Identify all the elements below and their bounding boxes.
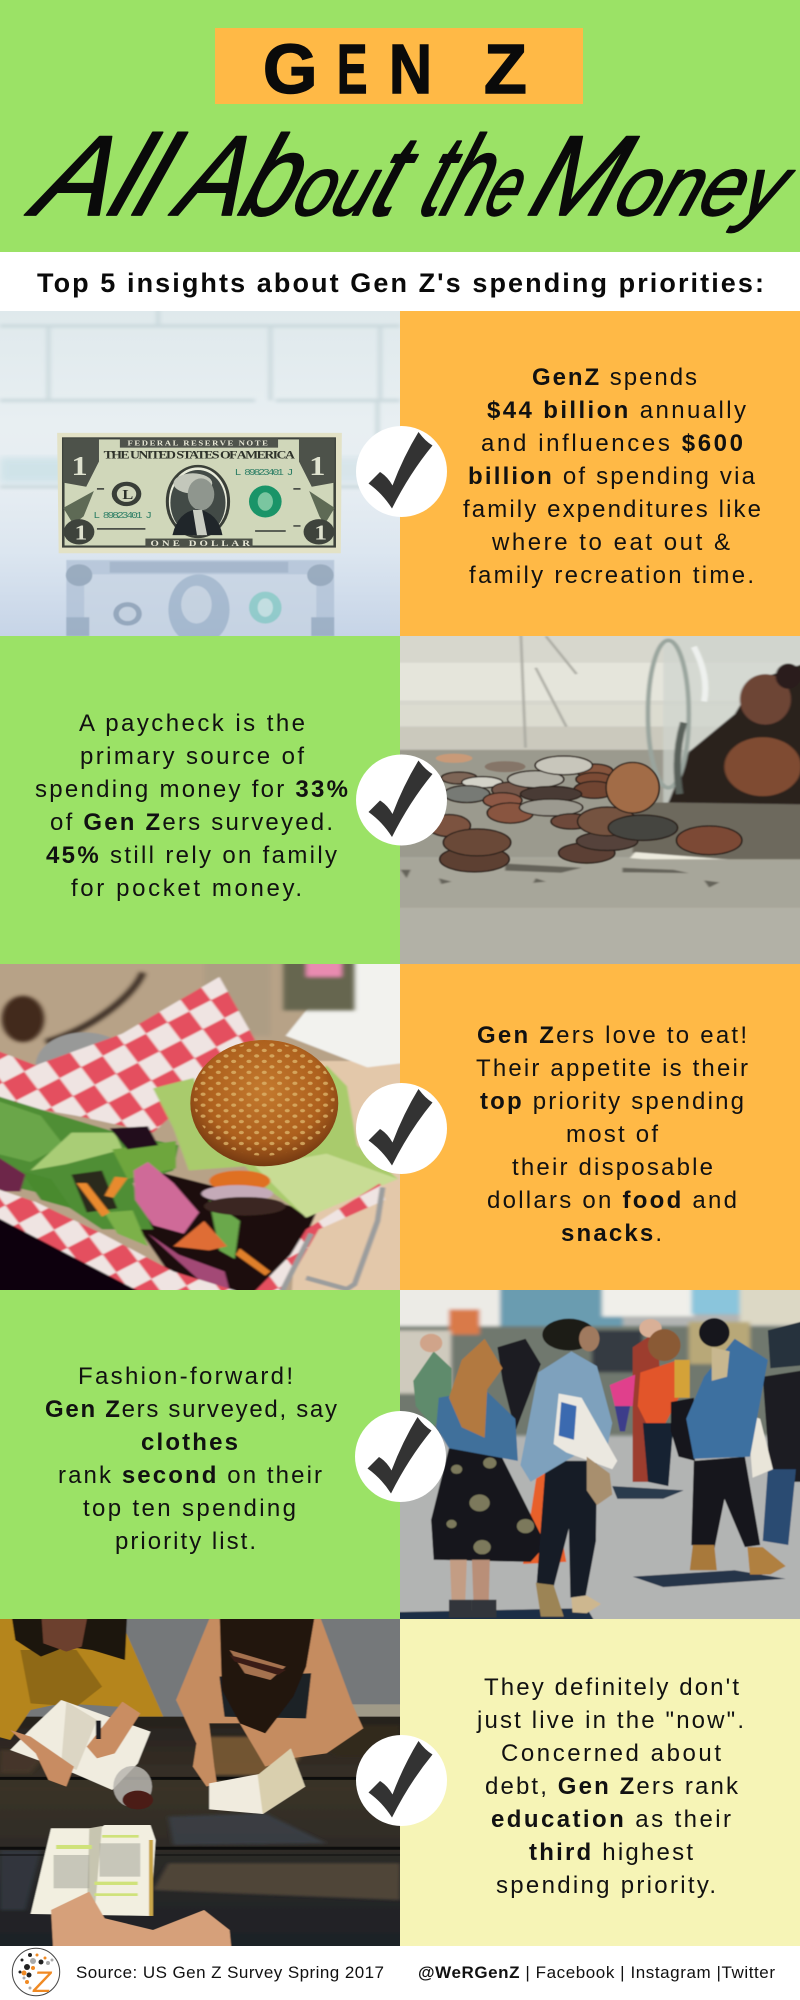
- insight text 5: spending priority.: [496, 1872, 716, 1899]
- icon: check mark 4: [355, 1411, 446, 1502]
- reflection: [66, 560, 334, 645]
- photo: dollar bill: THE UNITED STATES OF AMERICA: [104, 449, 296, 461]
- insight text 1: where to eat out &: [491, 529, 730, 556]
- panel: insight 3: [0, 947, 800, 1309]
- paper and handle: [0, 1188, 238, 1290]
- yellow background: [400, 1619, 800, 1946]
- insight text 3: Their appetite is their: [476, 1055, 748, 1082]
- insight text 4: Gen Zers surveyed, say: [45, 1396, 337, 1423]
- photo: burger and salad: [0, 964, 400, 1290]
- insight text 4: rank second on their: [58, 1462, 322, 1489]
- gen z label: Z: [484, 30, 527, 108]
- title: all about the money: All: [15, 111, 195, 239]
- insight text 5: just live in the "now".: [476, 1707, 744, 1734]
- insight text 3: snacks.: [561, 1220, 662, 1247]
- lower book: [31, 1825, 156, 1916]
- title: all about the money: [15, 111, 800, 239]
- insight text 5: They definitely don't: [484, 1674, 739, 1701]
- orange background: [400, 964, 800, 1290]
- photo: dollar bill: ONE DOLLAR: [151, 539, 251, 549]
- panel: insight 5: [0, 1607, 800, 1957]
- insight text 4: top ten spending: [83, 1495, 296, 1522]
- insight text 2: of Gen Zers surveyed.: [50, 809, 333, 836]
- greens: [0, 1090, 179, 1229]
- insight text 1: billion of spending via: [468, 463, 756, 490]
- insight text 3: [476, 1022, 748, 1247]
- header band: [0, 0, 800, 252]
- photo: dollar bill: L 89823401 J: [235, 468, 293, 479]
- green background: [0, 1290, 400, 1619]
- insight text 3: Gen Zers love to eat!: [477, 1022, 747, 1049]
- woman in denim jacket: [671, 1398, 695, 1461]
- insight text 5: [476, 1674, 744, 1899]
- photo: students reading at table: [0, 1619, 400, 1946]
- insight text 4: clothes: [141, 1429, 238, 1456]
- title: all about the money: About: [159, 111, 434, 239]
- insight text 5: third highest: [529, 1839, 693, 1866]
- insight text 2: 45% still rely on family: [46, 842, 337, 869]
- icon: we are gen z logo: [12, 1948, 60, 1999]
- insight text 4: priority list.: [115, 1528, 256, 1555]
- icon: check mark 1: [356, 426, 447, 517]
- insight text 1: GenZ spends: [532, 364, 697, 391]
- subtitle band: [0, 252, 800, 311]
- insight text 4: Fashion-forward!: [78, 1363, 293, 1390]
- insight text 2: spending money for 33%: [35, 776, 348, 803]
- icon: we are gen z logo: Z: [32, 1966, 53, 1999]
- background crowd: [413, 1351, 452, 1427]
- icon: check mark 2: [356, 754, 447, 846]
- man with tote: [537, 1461, 597, 1598]
- icon: check mark 5: [356, 1735, 447, 1826]
- social links: @WeRGenZ | Facebook | Instagram |Twitter: [418, 1963, 775, 1982]
- gen z label: E: [337, 30, 367, 108]
- gen z label: N: [389, 29, 432, 108]
- hand and arm: [50, 1892, 232, 1946]
- insight text 3: their disposable: [512, 1154, 713, 1181]
- insight text 1: family recreation time.: [469, 562, 754, 589]
- photo: dollar bill: L: [122, 488, 133, 503]
- left woman: [0, 1607, 163, 1740]
- insight text 3: top priority spending: [480, 1088, 744, 1115]
- insight text 3: most of: [566, 1121, 658, 1148]
- text block: [400, 311, 800, 636]
- insight text 2: A paycheck is the: [79, 710, 305, 737]
- title: all about the money: the: [407, 111, 551, 239]
- insight text 4: [45, 1363, 337, 1555]
- insight text 5: debt, Gen Zers rank: [485, 1773, 739, 1800]
- street shadows: [400, 1608, 594, 1619]
- dark tray: [0, 1218, 139, 1290]
- footer: [0, 1946, 800, 2000]
- photo: dollar bill: 1: [309, 452, 326, 481]
- insight text 5: education as their: [491, 1806, 731, 1833]
- photo: dollar bill: 1: [71, 452, 88, 481]
- source line: Source: US Gen Z Survey Spring 2017: [76, 1963, 384, 1982]
- coins: [428, 754, 742, 872]
- panel: insight 2: [0, 624, 800, 977]
- insight text 2: primary source of: [80, 743, 304, 770]
- insight text 2: [35, 710, 348, 902]
- photo: dollar bill: 1: [314, 521, 327, 545]
- wood planks: [0, 1725, 400, 1910]
- cone: [523, 1465, 566, 1564]
- insight text 1: family expenditures like: [463, 496, 761, 523]
- photo: dollar bill: [0, 310, 400, 645]
- photo: dollar bill: 1: [74, 521, 87, 545]
- jar: [662, 662, 800, 804]
- subtitle band: Top 5 insights about Gen Z's spending priorities:: [37, 268, 764, 298]
- insight text 5: Concerned about: [501, 1740, 721, 1767]
- icon: check mark 3: [356, 1083, 447, 1174]
- photo: coins and jar: [400, 636, 800, 964]
- bill: [57, 433, 342, 553]
- insight text 1: and influences $600: [481, 430, 743, 457]
- insight text 1: $44 billion annually: [487, 397, 746, 424]
- center woman: [176, 1607, 363, 1787]
- gen z label: [215, 28, 583, 108]
- photo: dollar bill: FEDERAL RESERVE NOTE: [128, 439, 268, 447]
- green background: [0, 636, 400, 964]
- cup: [113, 1766, 152, 1807]
- photo: street market shoppers: [400, 1290, 800, 1619]
- burger: [153, 1065, 398, 1217]
- gen z label: G: [263, 30, 317, 108]
- panel: insight 4: [0, 1276, 800, 1633]
- woman with skirt: [431, 1448, 546, 1562]
- insight text 1: [463, 364, 761, 589]
- panel: insight 1: [0, 310, 800, 645]
- insight text 2: for pocket money.: [71, 875, 302, 902]
- insight text 3: dollars on food and: [487, 1187, 737, 1214]
- photo: dollar bill: L 89823401 J: [93, 511, 152, 522]
